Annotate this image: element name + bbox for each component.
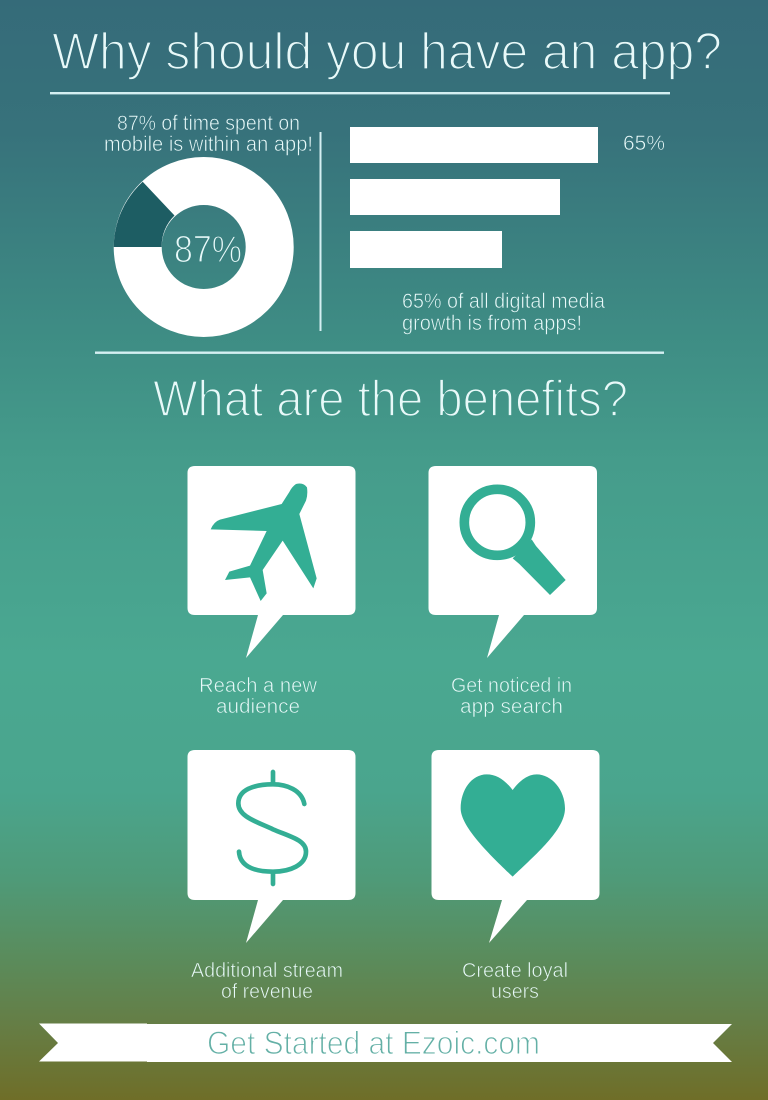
speech bubble [428, 466, 597, 658]
donut caption: 87% of time spent on [117, 112, 300, 135]
divider: top [50, 92, 670, 94]
panel: get noticed in app search [428, 466, 597, 718]
call to action: Get Started at Ezoic.com [207, 1025, 540, 1061]
label: Get noticed in [451, 674, 572, 697]
speech bubble [188, 466, 356, 658]
donut chart [114, 181, 270, 313]
label: of revenue [221, 980, 313, 1003]
donut value: 87% [174, 229, 242, 271]
label: Create loyal [462, 959, 568, 982]
ribbon banner [39, 1024, 732, 1062]
title: Why should you have an app? [52, 23, 722, 81]
divider: vertical [320, 132, 322, 331]
speech bubble [188, 750, 356, 943]
bar value: 65% [623, 132, 665, 155]
heading: benefits: What are the benefits? [153, 370, 628, 427]
bar chart caption: 65% of all digital media [402, 290, 605, 313]
bar 2 [350, 179, 560, 215]
divider: middle [95, 352, 664, 354]
label: app search [460, 695, 563, 718]
panel: reach a new audience [188, 466, 356, 718]
panel: create loyal users [432, 750, 600, 1003]
label: Additional stream [191, 959, 343, 982]
label: audience [216, 695, 300, 718]
icon: airplane [211, 483, 317, 601]
donut caption: mobile is within an app! [104, 133, 313, 156]
panel: additional stream of revenue [188, 750, 356, 1003]
speech bubble [432, 750, 600, 943]
bar chart [350, 127, 665, 268]
label: Reach a new [199, 674, 317, 697]
label: users [491, 980, 539, 1003]
panel: donut statistic [104, 112, 313, 313]
ribbon shape [39, 1024, 732, 1062]
bar chart caption: growth is from apps! [402, 312, 582, 335]
bar 3 [350, 231, 502, 268]
icon: dollar sign [238, 772, 306, 884]
icon: heart [461, 774, 565, 877]
icon: magnifying glass [464, 489, 566, 595]
bar 1 [350, 127, 598, 163]
